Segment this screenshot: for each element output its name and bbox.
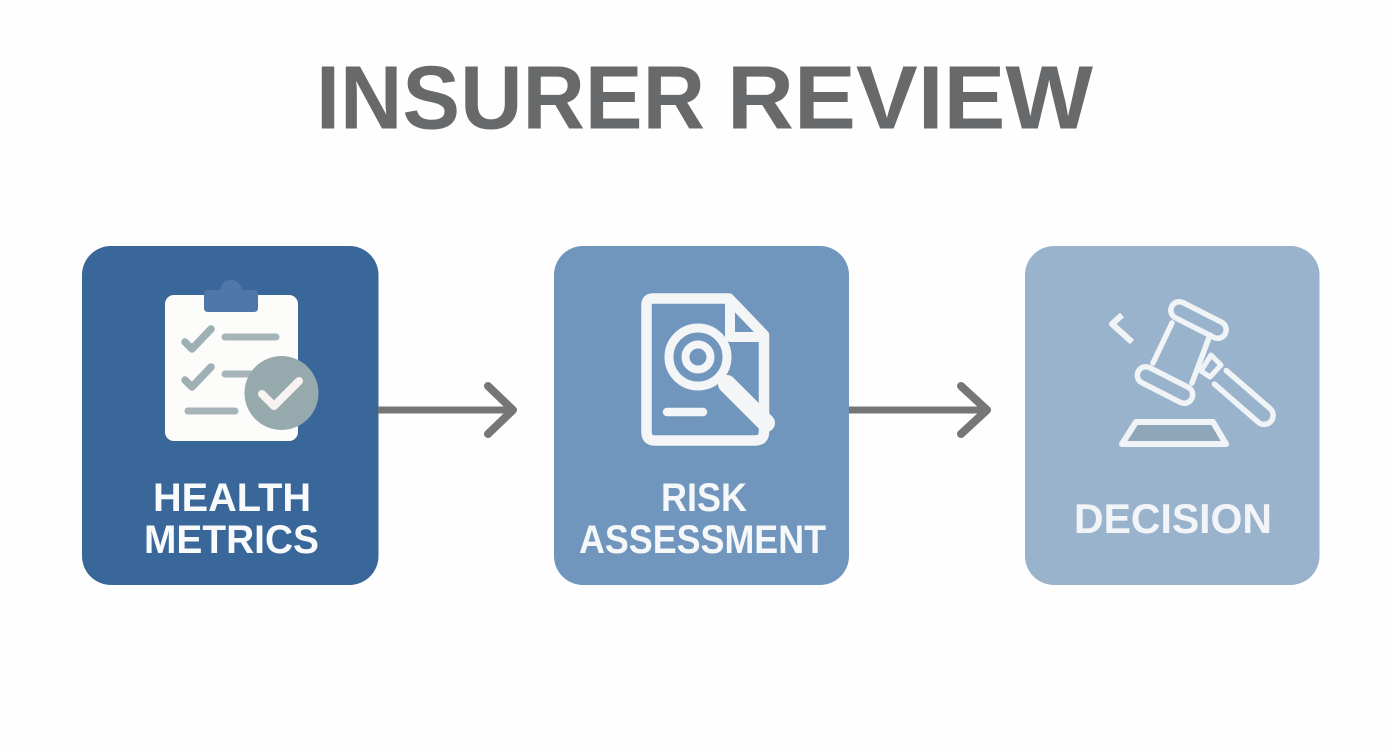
arrow: risk assessment to decision — [849, 386, 987, 434]
label: health metrics: HEALTH — [153, 476, 311, 520]
label: risk assessment: RISK — [661, 476, 747, 520]
icon: document with magnifier — [646, 298, 766, 440]
label: health metrics — [144, 476, 319, 562]
label: risk assessment — [579, 476, 826, 562]
title: INSURER — [316, 48, 705, 148]
icon: gavel — [1112, 299, 1277, 444]
icon: clipboard with checklist — [165, 280, 318, 441]
label: decision: DECISION — [1074, 495, 1272, 542]
panel: risk assessment — [554, 246, 849, 585]
title — [316, 48, 1093, 148]
title: REVIEW — [727, 48, 1093, 148]
panel: health metrics — [82, 246, 378, 585]
label: health metrics: METRICS — [144, 518, 319, 562]
panel: decision — [1025, 246, 1320, 585]
arrow: health metrics to risk assessment — [378, 386, 513, 434]
label: risk assessment: ASSESSMENT — [579, 518, 826, 562]
